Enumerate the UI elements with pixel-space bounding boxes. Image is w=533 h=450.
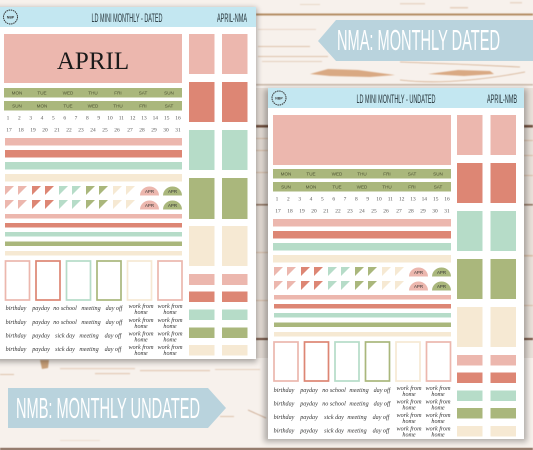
header bar: NBP (7, 16, 15, 20)
weekday strips: MON (12, 90, 22, 96)
APR semicircle tabs: APR (145, 203, 154, 208)
sheet shadow: dated (0, 8, 257, 362)
date numbers: 29 (420, 208, 426, 214)
script word stickers: work from (128, 344, 154, 351)
script word stickers: no school (53, 320, 77, 326)
script word stickers: no school (53, 306, 77, 312)
sheet: LD mini monthly undated (268, 88, 524, 439)
date numbers: 21 (323, 208, 329, 214)
script word stickers: work from (158, 330, 183, 338)
date numbers: 15 (433, 196, 439, 202)
script word stickers: meeting (79, 334, 99, 340)
script word stickers: payday (31, 306, 50, 312)
script word stickers: meeting (79, 347, 99, 353)
script word stickers: home (402, 419, 416, 425)
blank title block (273, 115, 451, 165)
script word stickers: work from (128, 330, 154, 338)
wide colour bars (273, 219, 451, 262)
date numbers: 14 (422, 196, 427, 202)
date numbers: 14 (153, 116, 158, 122)
date numbers: 20 (311, 208, 317, 214)
script word stickers: birthday (6, 306, 27, 312)
script word stickers: work from (158, 303, 183, 310)
April title block (4, 34, 182, 83)
weekday strips: TUE (63, 104, 73, 108)
weekday strips (4, 88, 182, 110)
weekday strips: FRI (383, 172, 391, 176)
banner: NMB monthly undated: NMB: MONTHLY UNDATED (16, 393, 200, 425)
date numbers: 19 (30, 128, 36, 134)
date numbers: 22 (66, 128, 72, 134)
weekday strips: SAT (165, 104, 173, 108)
weekday strips: SUN (433, 172, 443, 176)
date numbers: 9 (366, 196, 369, 202)
script word stickers: birthday (274, 388, 295, 394)
date numbers: 12 (399, 196, 405, 202)
date numbers: 7 (75, 116, 78, 122)
date numbers: 11 (388, 196, 393, 202)
script word stickers: home (431, 392, 445, 398)
script word stickers: home (163, 324, 177, 330)
script word stickers: payday (299, 388, 318, 394)
header bar: APRIL-NMA (217, 11, 247, 25)
script word stickers: home (431, 432, 445, 438)
date numbers: 22 (335, 208, 341, 214)
sheet shadow: undated (264, 89, 527, 442)
date numbers: 15 (164, 116, 170, 122)
date numbers: 25 (371, 208, 377, 214)
APR semicircle tabs (140, 187, 182, 210)
weekday strips: SAT (434, 184, 442, 190)
date numbers: 8 (355, 196, 358, 202)
APR semicircle tabs: APR (414, 284, 423, 289)
date numbers: 5 (321, 196, 324, 202)
APR semicircle tabs: APR (168, 189, 177, 194)
date numbers: 3 (29, 116, 32, 122)
script word stickers: payday (31, 320, 50, 326)
weekday strips: SAT (139, 90, 147, 96)
APR semicircle tabs (409, 268, 451, 290)
date numbers: 13 (141, 116, 147, 122)
date numbers: 29 (151, 128, 157, 134)
script word stickers: work from (426, 412, 451, 419)
side colour blocks (189, 34, 248, 356)
script word stickers: day off (374, 400, 392, 408)
date numbers: 3 (298, 196, 301, 202)
date numbers: 16 (444, 196, 450, 202)
script word stickers: day off (373, 428, 391, 434)
script word stickers: home (163, 310, 177, 316)
date numbers: 18 (287, 208, 293, 214)
date numbers: 17 (6, 128, 12, 134)
date numbers: 21 (54, 128, 60, 134)
thin colour bars (5, 214, 182, 256)
script word stickers: day off (106, 305, 124, 312)
header bar: NBP (275, 96, 283, 100)
corner flag triangles (5, 186, 135, 209)
date numbers: 6 (63, 116, 66, 122)
script word stickers: work from (396, 385, 422, 392)
date numbers: 19 (299, 208, 305, 214)
weekday strips: TUE (332, 184, 342, 190)
script word stickers: work from (396, 412, 422, 419)
weekday strips: WED (88, 104, 99, 108)
date numbers: 31 (175, 128, 181, 134)
date numbers: 4 (41, 116, 44, 122)
date numbers (6, 116, 181, 134)
APR semicircle tabs: APR (437, 284, 446, 289)
date numbers: 27 (127, 128, 133, 134)
sheet: LD mini monthly dated (0, 7, 256, 359)
date numbers: 6 (332, 196, 335, 202)
date numbers: 30 (163, 128, 169, 134)
script word stickers: sick day (324, 428, 344, 434)
script word stickers: payday (299, 402, 318, 408)
thin colour bars (274, 295, 451, 336)
date numbers: 26 (114, 128, 120, 134)
date numbers: 8 (86, 116, 89, 122)
weekday strips: THU (382, 184, 392, 190)
script word stickers: day off (105, 346, 123, 353)
header bar (0, 7, 256, 27)
script word stickers: work from (158, 344, 183, 351)
date numbers: 26 (383, 208, 389, 214)
date numbers: 28 (408, 208, 414, 214)
weekday strips: SUN (281, 184, 291, 190)
weekday strips: MON (281, 172, 291, 176)
weekday strips (273, 169, 451, 192)
script word stickers: home (402, 406, 416, 412)
date numbers (275, 196, 450, 214)
date numbers: 23 (78, 128, 84, 134)
script word stickers: home (134, 351, 148, 357)
framed note boxes (274, 342, 450, 381)
header bar (268, 88, 524, 108)
weekday strips: THU (357, 172, 367, 176)
corner flag triangles (274, 267, 404, 290)
script word stickers: meeting (81, 320, 101, 326)
script word stickers: birthday (274, 402, 295, 408)
APR semicircle tabs: APR (145, 189, 154, 194)
date numbers: 1 (276, 196, 279, 202)
script word stickers: no school (322, 388, 346, 394)
header bar: LD MINI MONTHLY - DATED (92, 11, 163, 25)
weekday strips: FRI (139, 104, 147, 108)
date numbers: 13 (410, 196, 416, 202)
weekday strips: THU (113, 104, 123, 108)
script word stickers: work from (158, 317, 183, 324)
APR semicircle tabs: APR (414, 270, 423, 275)
script word stickers: payday (31, 347, 50, 353)
date numbers: 18 (18, 128, 24, 134)
script word stickers: birthday (6, 334, 27, 340)
script word stickers: work from (128, 317, 154, 324)
weekday strips: FRI (114, 90, 122, 96)
script word stickers: birthday (6, 347, 27, 353)
script word stickers: meeting (81, 306, 101, 312)
date numbers: 30 (432, 208, 438, 214)
date numbers: 2 (287, 196, 290, 202)
script word stickers: meeting (349, 388, 369, 394)
script word stickers: work from (128, 303, 154, 310)
date numbers: 24 (359, 208, 365, 214)
date numbers: 28 (139, 128, 145, 134)
weekday strips: THU (88, 90, 98, 96)
script word stickers: work from (426, 426, 451, 432)
weekday strips: TUE (306, 172, 316, 176)
date numbers: 25 (102, 128, 108, 134)
date numbers: 9 (97, 116, 100, 122)
date numbers: 12 (130, 116, 136, 122)
script word stickers (274, 385, 451, 438)
script word stickers: payday (299, 428, 318, 434)
script word stickers: payday (299, 415, 318, 421)
script word stickers: sick day (55, 347, 75, 353)
date numbers: 5 (52, 116, 55, 122)
weekday strips: WED (332, 172, 343, 176)
script word stickers: home (402, 432, 416, 438)
weekday strips: MON (37, 104, 47, 108)
date numbers: 24 (90, 128, 96, 134)
weekday strips: MON (306, 184, 316, 190)
script word stickers: meeting (349, 402, 369, 408)
script word stickers (6, 303, 183, 357)
script word stickers: day off (105, 332, 123, 340)
header bar: LD MINI MONTHLY - UNDATED (356, 92, 436, 106)
script word stickers: home (431, 406, 445, 412)
date numbers: 11 (119, 116, 124, 122)
script word stickers: work from (396, 426, 422, 432)
script word stickers: payday (31, 334, 50, 340)
date numbers: 10 (376, 196, 382, 202)
side colour blocks (457, 115, 516, 436)
date numbers: 31 (444, 208, 450, 214)
script word stickers: day off (373, 414, 391, 421)
weekday strips: SUN (12, 104, 22, 108)
script word stickers: meeting (347, 428, 367, 434)
script word stickers: day off (374, 387, 392, 394)
date numbers: 23 (347, 208, 353, 214)
script word stickers: home (134, 310, 148, 316)
script word stickers: day off (106, 319, 124, 326)
date numbers: 20 (42, 128, 48, 134)
date numbers: 7 (344, 196, 347, 202)
script word stickers: meeting (347, 415, 367, 421)
script word stickers: birthday (274, 428, 295, 434)
April title block: APRIL (57, 48, 129, 75)
weekday strips: TUE (37, 90, 47, 96)
script word stickers: sick day (324, 415, 344, 421)
script word stickers: work from (426, 398, 451, 406)
script word stickers: sick day (55, 334, 75, 340)
weekday strips: FRI (408, 184, 416, 190)
date numbers: 16 (175, 116, 181, 122)
date numbers: 2 (18, 116, 21, 122)
APR semicircle tabs: APR (437, 270, 446, 275)
weekday strips: WED (357, 184, 368, 190)
weekday strips: SAT (408, 172, 416, 176)
date numbers: 4 (310, 196, 313, 202)
APR semicircle tabs: APR (168, 203, 177, 208)
banner: NMB monthly undated (8, 388, 226, 428)
script word stickers: home (134, 324, 148, 330)
weekday strips: WED (63, 90, 74, 96)
date numbers: 27 (396, 208, 402, 214)
script word stickers: home (402, 392, 416, 398)
framed note boxes (6, 261, 182, 300)
script word stickers: work from (396, 398, 422, 406)
script word stickers: home (163, 351, 177, 357)
script word stickers: home (163, 338, 177, 344)
date numbers: 1 (7, 116, 10, 122)
date numbers: 17 (275, 208, 281, 214)
wide colour bars (5, 138, 182, 182)
script word stickers: home (431, 419, 445, 425)
script word stickers: no school (322, 402, 346, 408)
script word stickers: birthday (6, 320, 27, 326)
script word stickers: home (134, 338, 148, 344)
date numbers: 10 (107, 116, 113, 122)
script word stickers: work from (426, 385, 451, 392)
script word stickers: birthday (274, 415, 295, 421)
weekday strips: SUN (164, 90, 174, 96)
